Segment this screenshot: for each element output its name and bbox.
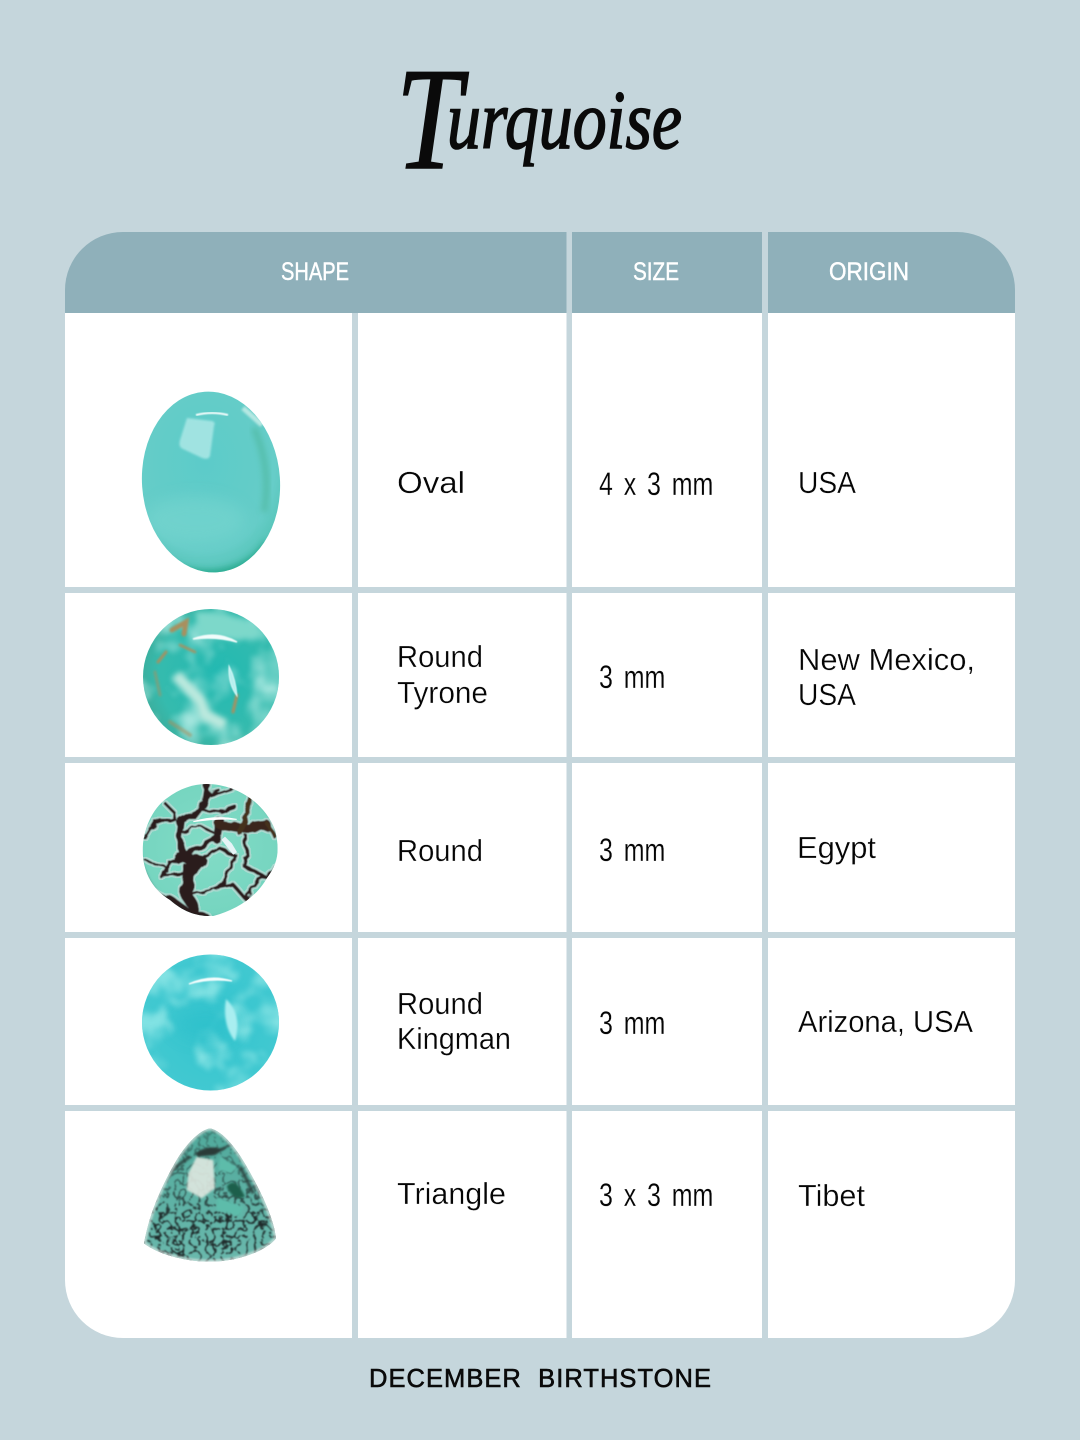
table header: size: SIZE: [633, 258, 679, 286]
title: [396, 38, 682, 200]
size: 3 mm: 3 mm: [599, 1006, 665, 1042]
label: oval: Oval: [397, 465, 465, 500]
icon: round tyrone stone: [143, 609, 279, 745]
icon: oval turquoise stone: [142, 392, 280, 572]
table panel: [65, 232, 1015, 1338]
size: 3 x 3 mm: 3 x 3 mm: [599, 1178, 713, 1214]
row: triangle: [140, 1123, 865, 1267]
row: oval: [142, 392, 856, 572]
footer caption: DECEMBER BIRTHSTONE: [369, 1365, 711, 1393]
label: round tyrone: Round: [397, 639, 483, 674]
origin: egypt: Egypt: [797, 830, 876, 865]
size: 3 mm: 3 mm: [599, 833, 665, 869]
icon: triangle stone: [144, 1128, 276, 1262]
table header: shape: [65, 232, 566, 313]
table body: [65, 313, 1015, 1338]
icon: round kingman stone: [142, 954, 279, 1090]
title: T: [396, 38, 469, 200]
icon: spiderweb turquoise stone: [142, 784, 278, 916]
label: triangle: Triangle: [397, 1176, 506, 1211]
origin: tibet: Tibet: [798, 1178, 865, 1213]
title: urquoise: [447, 74, 682, 167]
size: 4 x 3 mm: 4 x 3 mm: [599, 467, 713, 503]
table header: shape: SHAPE: [281, 258, 349, 286]
row: round tyrone: Tyrone: [397, 675, 488, 710]
size: 3 mm: 3 mm: [599, 660, 665, 696]
origin: arizona, usa: Arizona, USA: [798, 1004, 973, 1039]
table header: size: [572, 232, 762, 313]
row: round kingman: [138, 950, 973, 1095]
origin: USA: USA: [798, 465, 856, 500]
row: round kingman: Kingman: [397, 1021, 511, 1056]
row: round egypt: [142, 784, 876, 916]
row: round tyrone: [140, 605, 975, 750]
table header: origin: [768, 232, 1015, 313]
label: round: Round: [397, 833, 483, 868]
row: round tyrone: USA: [798, 677, 856, 712]
origin: new mexico, usa: New Mexico,: [798, 642, 975, 677]
label: round kingman: Round: [397, 986, 483, 1021]
table header: origin: ORIGIN: [829, 258, 909, 286]
